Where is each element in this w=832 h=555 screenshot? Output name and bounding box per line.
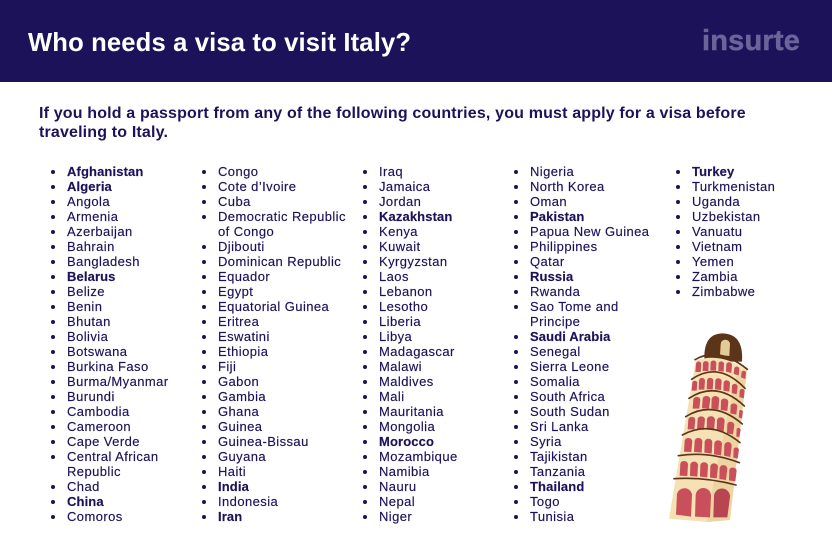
country list: column 2: Fiji	[218, 359, 236, 374]
country list: column 4: Somalia	[530, 374, 580, 389]
cornice bands	[674, 355, 747, 485]
country list: column 2: Eswatini	[218, 329, 270, 344]
country list: column 1: Benin	[67, 299, 102, 314]
country list: column 2: Democratic Republic	[218, 209, 346, 224]
country list: column 5: Zimbabwe	[692, 284, 755, 299]
country list: column 1: Comoros	[67, 509, 123, 524]
country list: column 1: Burundi	[67, 389, 115, 404]
country list: column 3: Nepal	[379, 494, 415, 509]
country list: column 5: Vanuatu	[692, 224, 742, 239]
country list: column 1: Azerbaijan	[67, 224, 133, 239]
country list: column 1: Cape Verde	[67, 434, 140, 449]
country list: column 4: Nigeria	[530, 164, 574, 179]
country list: column 1: Bahrain	[67, 239, 115, 254]
country list: column 4: Pakistan	[530, 209, 584, 224]
country list: column 3: Kazakhstan	[379, 209, 452, 224]
country list: column 2: Congo	[218, 164, 258, 179]
country list: column 2: India	[218, 479, 249, 494]
country list: column 1: Bangladesh	[67, 254, 140, 269]
country list: column 2: Cuba	[218, 194, 251, 209]
intro text: If you hold a passport from any of the following countries, you must apply for a visa before	[39, 105, 746, 122]
country list: column 3: Maldives	[379, 374, 434, 389]
country list: column 1: Burkina Faso	[67, 359, 149, 374]
country list: column 5: Turkey	[692, 164, 734, 179]
country list: column 4: South Sudan	[530, 404, 610, 419]
country list: column 3: Jamaica	[379, 179, 430, 194]
header band	[0, 0, 832, 82]
country list: column 4: Rwanda	[530, 284, 580, 299]
country list: column 2: Ghana	[218, 404, 259, 419]
country list: column 5	[676, 164, 775, 299]
country list: column 1: Botswana	[67, 344, 127, 359]
country list: column 1: Cameroon	[67, 419, 131, 434]
country list: column 3: Malawi	[379, 359, 422, 374]
country list: column 1: Republic	[67, 464, 121, 479]
country list: column 1: Central African	[67, 449, 159, 464]
country list: column 2: Ethiopia	[218, 344, 268, 359]
country list: column 4: Sierra Leone	[530, 359, 609, 374]
country list: column 5: Uganda	[692, 194, 740, 209]
country list: column 3: Liberia	[379, 314, 421, 329]
country list: column 3: Mauritania	[379, 404, 444, 419]
country list: column 1: Belarus	[67, 269, 116, 284]
country list: column 3: Niger	[379, 509, 412, 524]
tower body	[669, 358, 747, 522]
country list: column 3: Kenya	[379, 224, 418, 239]
country list: column 4: Tunisia	[530, 509, 574, 524]
country list: column 1: Afghanistan	[67, 164, 143, 179]
country list: column 5: Zambia	[692, 269, 738, 284]
arches	[676, 360, 746, 517]
country list: column 3	[363, 164, 458, 524]
country list: column 3: Morocco	[379, 434, 434, 449]
country list: column 3: Libya	[379, 329, 412, 344]
country list: column 2: Equatorial Guinea	[218, 299, 329, 314]
country list: column 4: Russia	[530, 269, 573, 284]
logo: insurte: insurte	[702, 25, 800, 57]
country list: column 2: Guinea-Bissau	[218, 434, 309, 449]
country list: column 1	[51, 164, 169, 524]
country list: column 3: Jordan	[379, 194, 421, 209]
icon: leaning tower of Pisa	[669, 333, 748, 522]
country list: column 2: Guinea	[218, 419, 262, 434]
intro text: traveling to Italy.	[39, 124, 168, 141]
country list: column 4: North Korea	[530, 179, 605, 194]
country list: column 3: Kyrgyzstan	[379, 254, 448, 269]
country list: column 1: Cambodia	[67, 404, 130, 419]
country list: column 2: Djibouti	[218, 239, 265, 254]
country list: column 4: Senegal	[530, 344, 581, 359]
country list: column 3: Lesotho	[379, 299, 428, 314]
country list: column 4: Syria	[530, 434, 562, 449]
country list: column 2	[202, 164, 346, 524]
country list: column 1: Algeria	[67, 179, 112, 194]
country list: column 4: Togo	[530, 494, 560, 509]
country list: column 3: Nauru	[379, 479, 417, 494]
country list: column 2: Gambia	[218, 389, 266, 404]
country list: column 2: Iran	[218, 509, 242, 524]
title: Who needs a visa to visit Italy?	[28, 29, 411, 57]
country list: column 3: Mali	[379, 389, 405, 404]
country list: column 2: Haiti	[218, 464, 246, 479]
country list: column 4: Philippines	[530, 239, 598, 254]
country list: column 4: South Africa	[530, 389, 605, 404]
country list: column 2: of Congo	[218, 224, 274, 239]
country list: column 4: Oman	[530, 194, 567, 209]
country list: column 3: Kuwait	[379, 239, 421, 254]
country list: column 4: Thailand	[530, 479, 584, 494]
country list: column 3: Mozambique	[379, 449, 458, 464]
country list: column 2: Eritrea	[218, 314, 259, 329]
country list: column 4: Principe	[530, 314, 580, 329]
country list: column 3: Laos	[379, 269, 409, 284]
country list: column 5: Yemen	[692, 254, 734, 269]
country list: column 1: China	[67, 494, 104, 509]
country list: column 2: Indonesia	[218, 494, 278, 509]
country list: column 5: Turkmenistan	[692, 179, 775, 194]
tower top dome	[704, 333, 742, 362]
country list: column 4: Tanzania	[530, 464, 585, 479]
country list: column 4: Qatar	[530, 254, 565, 269]
country list: column 1: Bhutan	[67, 314, 111, 329]
country list: column 4	[514, 164, 650, 524]
country list: column 2: Egypt	[218, 284, 253, 299]
country list: column 1: Armenia	[67, 209, 118, 224]
country list: column 5: Uzbekistan	[692, 209, 761, 224]
country list: column 1: Angola	[67, 194, 110, 209]
country list: column 4: Tajikistan	[530, 449, 588, 464]
country list: column 3: Namibia	[379, 464, 430, 479]
country list: column 4: Saudi Arabia	[530, 329, 610, 344]
country list: column 1: Belize	[67, 284, 105, 299]
country list: column 1: Burma/Myanmar	[67, 374, 169, 389]
country list: column 1: Chad	[67, 479, 100, 494]
country list: column 2: Equador	[218, 269, 270, 284]
country list: column 1: Bolivia	[67, 329, 108, 344]
intro text	[39, 105, 746, 141]
country list: column 2: Cote d’Ivoire	[218, 179, 296, 194]
country list: column 3: Iraq	[379, 164, 403, 179]
country list: column 5: Vietnam	[692, 239, 742, 254]
country list: column 4: Papua New Guinea	[530, 224, 649, 239]
country list: column 3: Mongolia	[379, 419, 435, 434]
country list: column 4: Sri Lanka	[530, 419, 589, 434]
country list: column 2: Dominican Republic	[218, 254, 341, 269]
country list: column 2: Guyana	[218, 449, 266, 464]
country list: column 3: Madagascar	[379, 344, 455, 359]
country list: column 4: Sao Tome and	[530, 299, 619, 314]
country list: column 3: Lebanon	[379, 284, 433, 299]
country list: column 2: Gabon	[218, 374, 259, 389]
